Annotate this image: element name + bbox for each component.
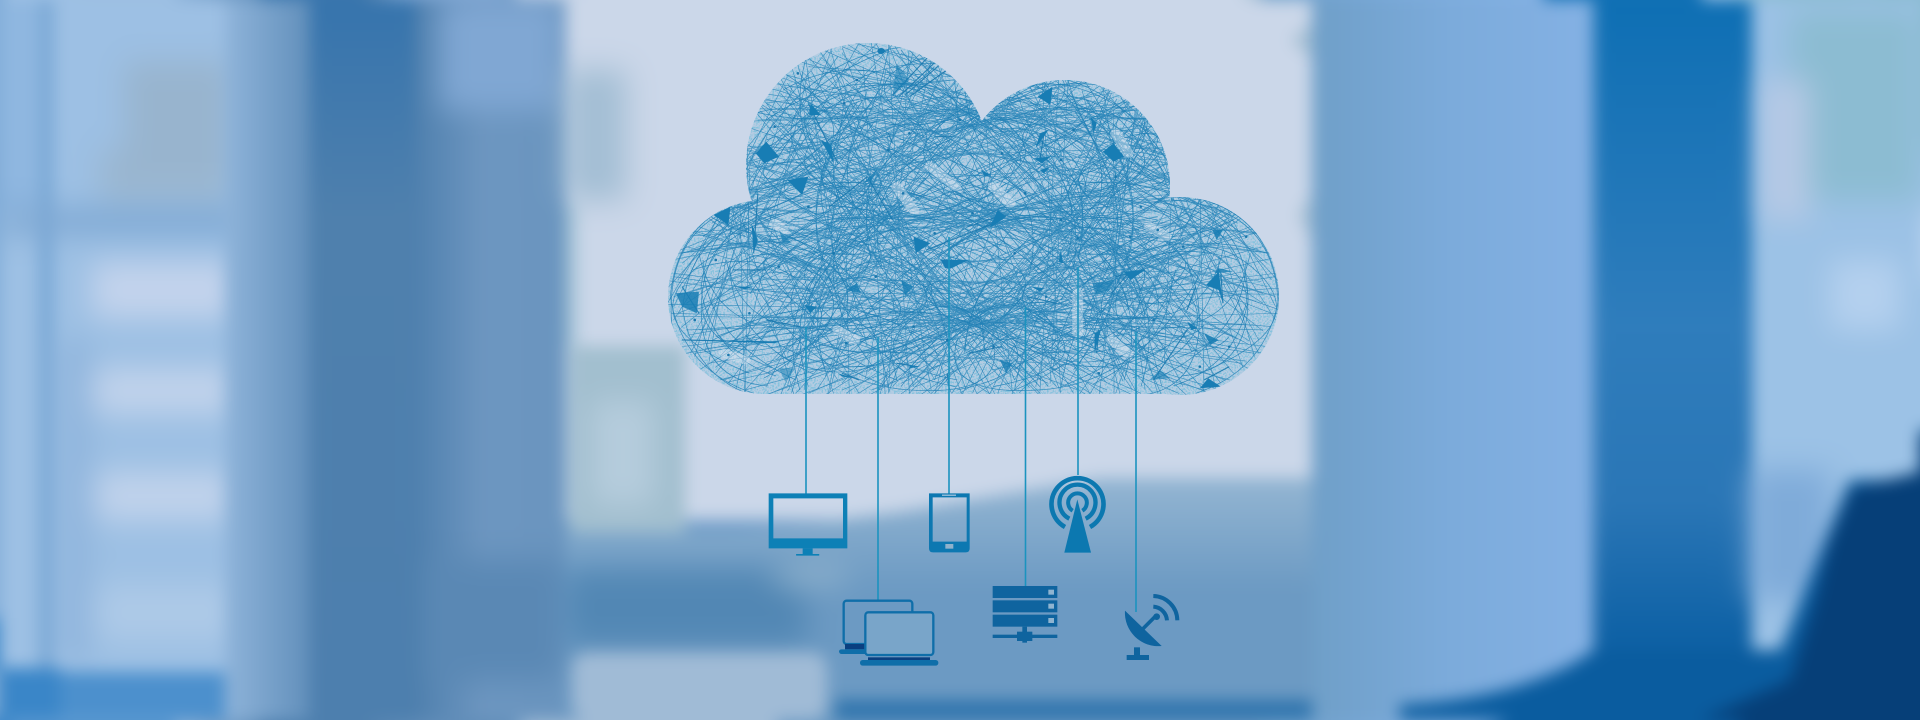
hanging connector lines — [806, 237, 1136, 612]
icon: desktop monitor — [769, 493, 847, 556]
icon: server rack — [993, 586, 1057, 643]
device icons — [769, 478, 1177, 666]
right window panel — [1400, 0, 1920, 720]
icon: laptops — [839, 601, 938, 666]
centre window — [566, 0, 1335, 720]
network mesh — [668, 43, 1279, 395]
network nodes — [676, 48, 1233, 388]
cloud made of network lines — [668, 43, 1279, 395]
left pillar — [225, 0, 565, 720]
icon: tablet — [929, 493, 970, 552]
icon: satellite dish — [1125, 596, 1177, 660]
navy foreground block — [1700, 472, 1920, 720]
left window panel — [0, 0, 265, 720]
icon: broadcast antenna — [1051, 478, 1103, 553]
right pillars — [1312, 0, 1759, 720]
